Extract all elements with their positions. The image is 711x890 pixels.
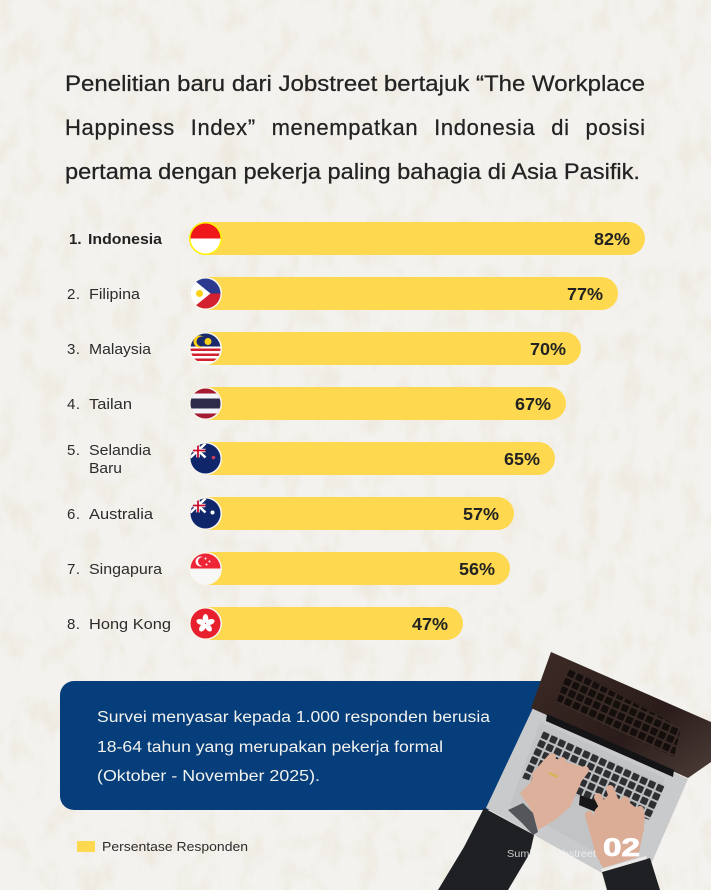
heading paragraph: pertama dengan pekerja paling bahagia di Asia Pasifik.	[65, 159, 640, 184]
row 6: Australia 57%	[67, 497, 514, 530]
row 3: Malaysia 70%: 3.	[67, 341, 80, 358]
row 5: Selandia Baru 65%: 65%	[504, 449, 540, 469]
row 6: Australia 57%: Australia	[89, 506, 154, 523]
legend: Persentase Responden	[102, 839, 248, 854]
bar chart: happiest workers by country	[67, 222, 645, 640]
row 3: Malaysia 70%: Malaysia	[89, 341, 152, 358]
row 6: Australia 57%: 57%	[463, 504, 499, 524]
row 5: Selandia Baru 65%: Baru	[89, 460, 122, 477]
row 4: Tailan 67%: 67%	[515, 394, 551, 414]
row 2: Filipina 77%	[67, 276, 618, 310]
right hand	[589, 789, 645, 868]
laptop base	[486, 708, 688, 873]
heading paragraph: Penelitian baru dari Jobstreet bertajuk “The Workplace	[65, 71, 645, 96]
heading paragraph	[65, 71, 645, 184]
heading paragraph: Happiness Index” menempatkan Indonesia di posisi	[65, 115, 645, 140]
row 5: Selandia Baru 65%	[67, 442, 555, 477]
row 8: Hong Kong 47%: 47%	[412, 614, 448, 634]
row 4: Tailan 67%	[67, 387, 566, 420]
row 1: Indonesia 82%: 82%	[594, 229, 630, 249]
right sleeve	[602, 858, 660, 890]
wrist watch	[508, 803, 538, 835]
row 7: Singapura 56%: 7.	[67, 561, 80, 578]
row 2: Filipina 77%: 77%	[567, 284, 603, 304]
row 1: Indonesia 82%: 1.	[69, 231, 82, 248]
row 4: Tailan 67%: Tailan	[89, 396, 132, 413]
row 1: Indonesia 82%: Indonesia	[88, 231, 163, 248]
row 7: Singapura 56%: Singapura	[89, 561, 163, 578]
left hand	[520, 757, 586, 830]
row 5: Selandia Baru 65%: 5.	[67, 442, 80, 459]
row 8: Hong Kong 47%	[67, 607, 463, 640]
shirt cuff	[601, 856, 647, 872]
row 7: Singapura 56%	[67, 552, 510, 585]
row 1: Indonesia 82%	[69, 222, 645, 255]
image: laptop and typing hands	[438, 652, 711, 890]
keyboard	[522, 730, 665, 820]
panel: survey note: Survei menyasar kepada 1.000 responden berusia	[97, 709, 490, 726]
row 2: Filipina 77%: 2.	[67, 286, 80, 303]
row 3: Malaysia 70%: 70%	[530, 339, 566, 359]
row 8: Hong Kong 47%: Hong Kong	[89, 616, 171, 633]
row 7: Singapura 56%: 56%	[459, 559, 495, 579]
row 6: Australia 57%: 6.	[67, 506, 80, 523]
source label: Sumber: Jobstreet	[507, 848, 596, 860]
row 4: Tailan 67%: 4.	[67, 396, 80, 413]
row 2: Filipina 77%: Filipina	[89, 286, 141, 303]
laptop lid	[531, 652, 711, 778]
hinge	[546, 714, 674, 777]
panel: survey note: (Oktober - November 2025).	[97, 768, 320, 785]
left sleeve	[438, 808, 534, 890]
row 8: Hong Kong 47%: 8.	[67, 616, 80, 633]
panel: survey note: 18-64 tahun yang merupakan pekerja formal	[97, 739, 443, 756]
row 5: Selandia Baru 65%: Selandia	[89, 442, 152, 459]
row 3: Malaysia 70%	[67, 332, 581, 365]
page number: 02	[603, 834, 640, 862]
panel: survey note	[60, 681, 545, 810]
